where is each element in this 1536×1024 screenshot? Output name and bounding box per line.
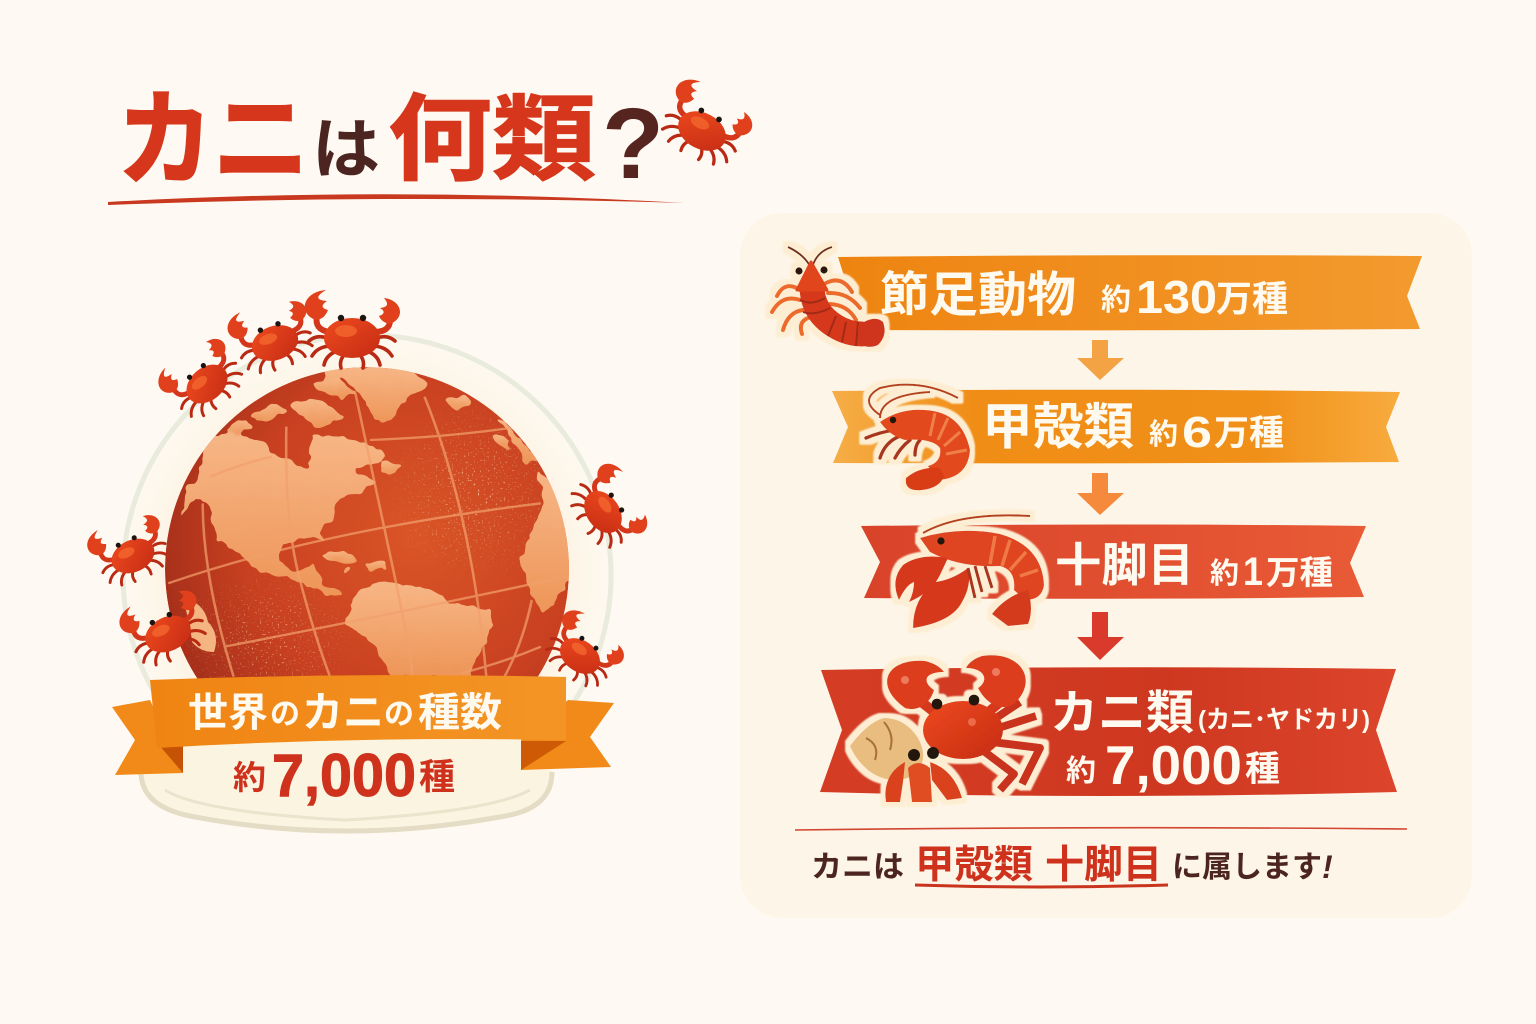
band: arthropods: 節足動物 xyxy=(880,269,1076,322)
band: arthropods: 約 xyxy=(1101,284,1131,317)
ribbon heading: の xyxy=(270,698,300,731)
band: decapods: 十脚目 xyxy=(1055,539,1194,591)
title xyxy=(108,83,684,205)
icon: crab lower right xyxy=(536,604,632,697)
band: crabs xyxy=(820,667,1397,796)
conclusion text xyxy=(811,844,1333,887)
band: crustaceans xyxy=(832,390,1400,463)
icon: crab left xyxy=(83,505,178,594)
band: arthropods: 万種 xyxy=(1216,278,1288,319)
band: crabs: (カニ･ヤドカリ) xyxy=(1198,706,1370,734)
ribbon heading: 種数 xyxy=(418,691,502,735)
icon: crab upper left 1 xyxy=(223,291,322,381)
title: 何類 xyxy=(388,87,596,192)
title: ? xyxy=(602,88,664,200)
band: decapods: 約 xyxy=(1210,557,1239,590)
title: は xyxy=(312,112,380,186)
band: crustaceans: 6 xyxy=(1182,408,1212,457)
band: crabs: カニ類 xyxy=(1050,686,1194,739)
band: crabs: 約 xyxy=(1066,755,1096,788)
ribbon heading: カニ xyxy=(302,689,384,736)
icon: crab upper left 2 xyxy=(152,329,253,428)
glass dome xyxy=(119,332,615,831)
ribbon heading: の xyxy=(384,698,414,731)
band: decapods: 万種 xyxy=(1266,554,1333,591)
ribbon heading: 世界 xyxy=(188,691,268,735)
band: arthropods: 130 xyxy=(1136,271,1217,323)
globe xyxy=(165,367,569,678)
icon: title crab xyxy=(652,73,760,175)
species count xyxy=(233,742,455,809)
band: crustaceans: 甲殻類 xyxy=(982,399,1134,455)
band: crabs: 7,000 xyxy=(1105,734,1242,796)
title: カニ xyxy=(117,83,309,199)
ribbon xyxy=(112,675,614,809)
panel: world crab species xyxy=(83,290,658,831)
band: arthropods xyxy=(838,255,1422,330)
icon: crab right xyxy=(561,458,658,558)
arrow xyxy=(1077,473,1124,515)
species count: 7,000 xyxy=(272,742,416,809)
conclusion text: カニは xyxy=(811,851,904,884)
panel: taxonomy xyxy=(740,213,1472,918)
icon: crayfish xyxy=(772,247,885,347)
grid lines xyxy=(168,393,566,677)
band: crustaceans: 約 xyxy=(1149,418,1178,451)
ribbon heading xyxy=(188,689,502,736)
icon: shrimp xyxy=(866,385,970,490)
arrow xyxy=(1077,340,1124,380)
conclusion text: 甲殻類 xyxy=(915,844,1033,887)
arrow xyxy=(1077,612,1124,660)
conclusion text: 十脚目 xyxy=(1045,844,1162,887)
icon: crab top xyxy=(305,290,400,368)
icon: crab and hermit crab xyxy=(850,655,1040,802)
conclusion text: に属します xyxy=(1172,851,1322,884)
band: crustaceans: 万種 xyxy=(1214,414,1284,453)
icon: lobster xyxy=(895,515,1044,628)
band: crabs: 種 xyxy=(1245,750,1280,789)
divider xyxy=(795,828,1407,830)
species count: 約 xyxy=(233,759,266,796)
conclusion text: ! xyxy=(1322,849,1333,885)
continents xyxy=(181,367,577,677)
band: decapods: 1 xyxy=(1243,550,1263,594)
icon: crab lower left xyxy=(114,580,216,674)
species count: 種 xyxy=(419,756,455,797)
band: decapods xyxy=(861,524,1366,599)
